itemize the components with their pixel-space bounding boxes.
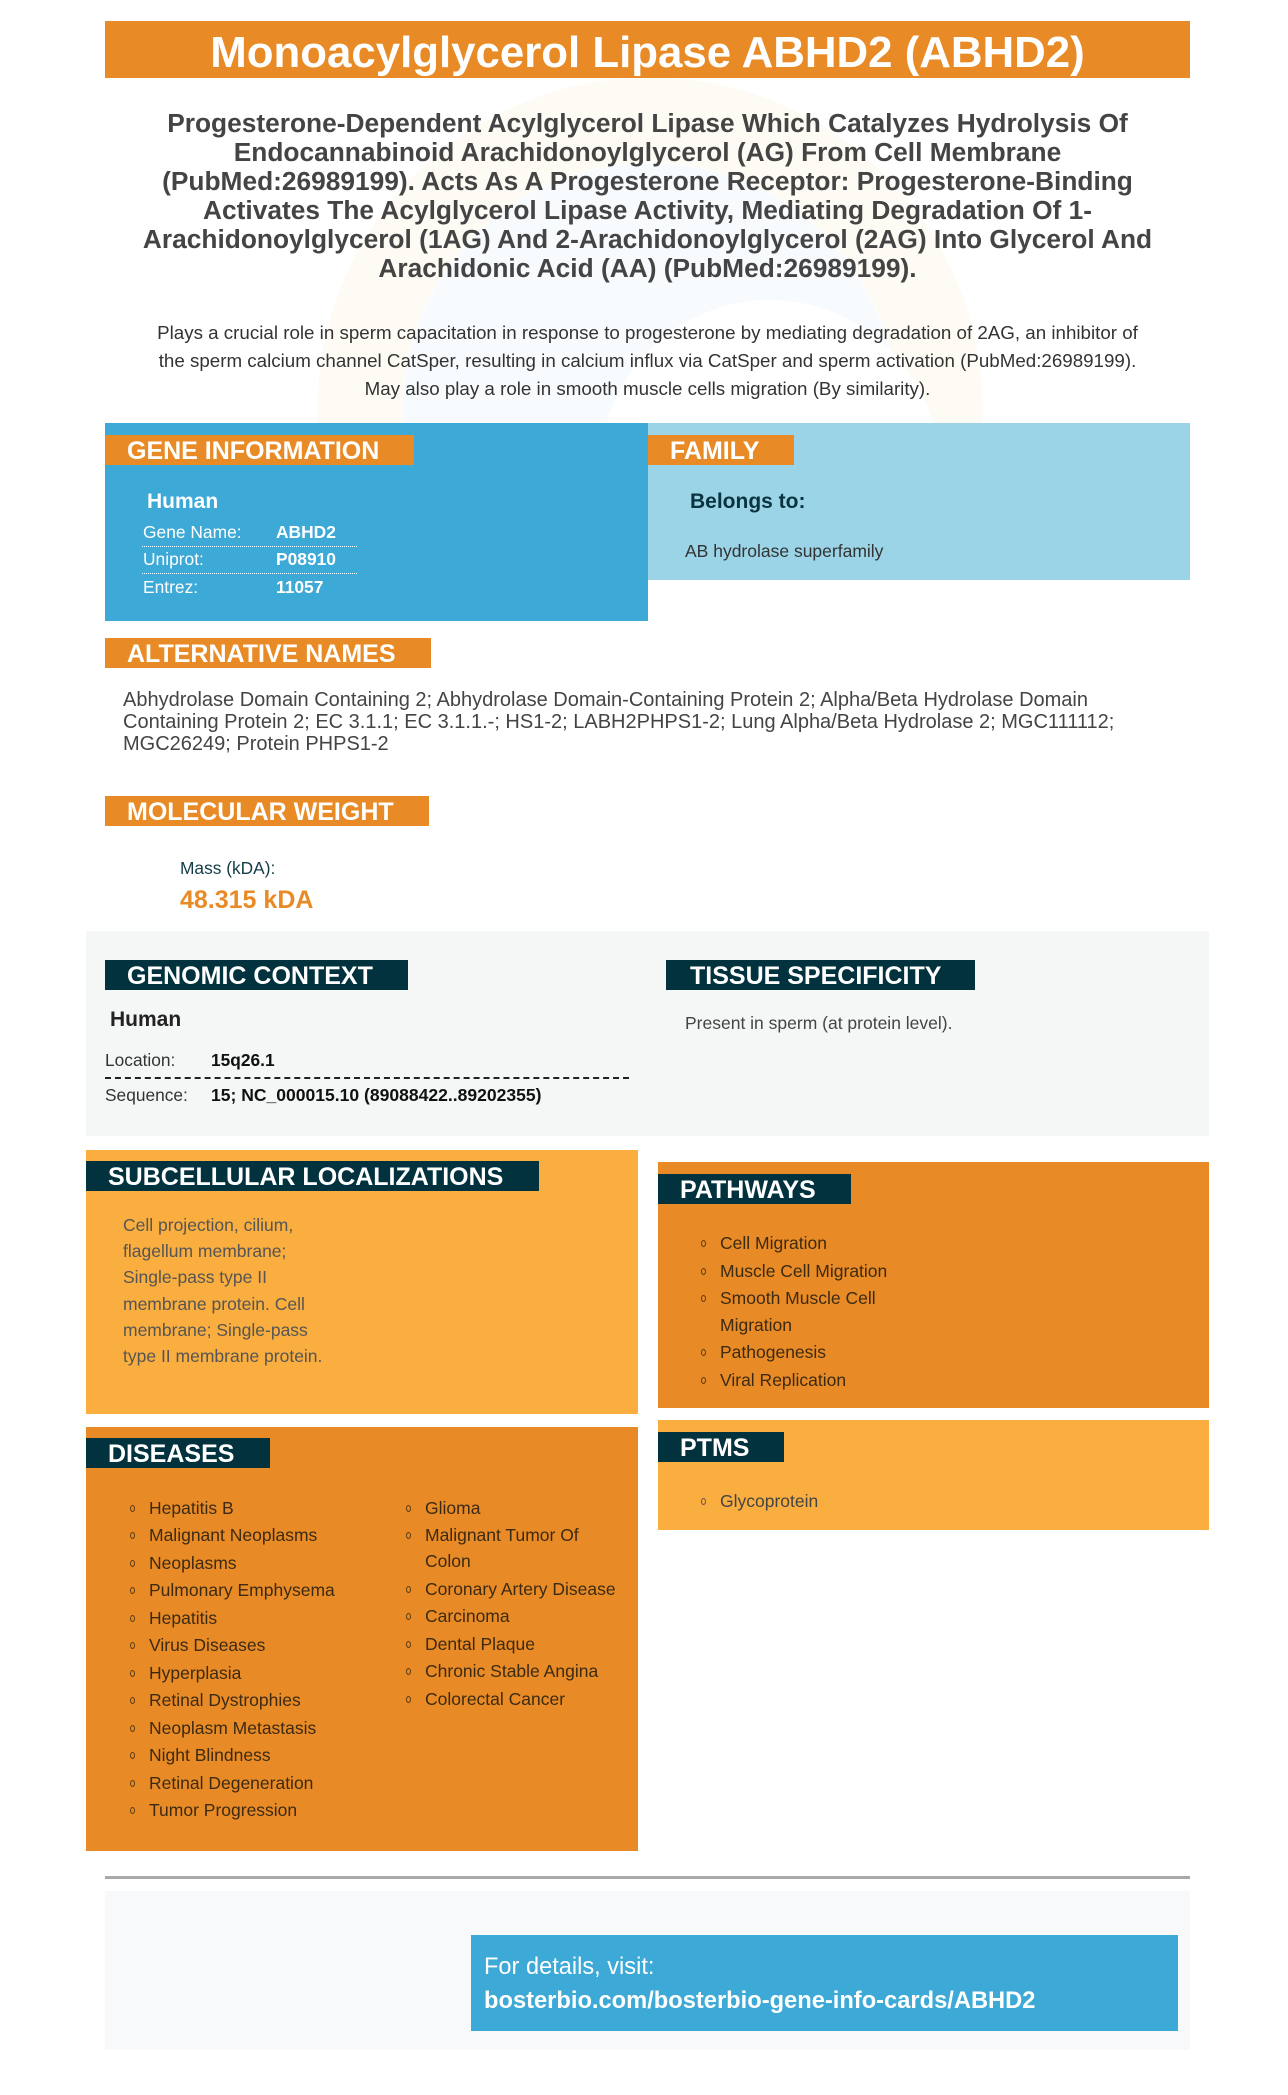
heading: diseases: DISEASES [108,1440,234,1468]
panel: family [648,423,1190,580]
pathway list: Migration [720,1315,792,1335]
sequence row: Sequence: [105,1085,188,1105]
disease list column 1: Retinal Dystrophies [149,1690,301,1710]
uniprot row: Uniprot: [143,549,204,569]
subtitle description: (PubMed:26989199). Acts As A Progesterone Receptor: Progesterone-Binding [162,166,1133,196]
panel: genomic context and tissue specificity [86,931,1209,1136]
disease list column 2: Carcinoma [425,1606,510,1626]
disease list column 1: Virus Diseases [149,1635,265,1655]
localization text [123,1215,322,1366]
alternative names text: MGC26249; Protein PHPS1-2 [123,733,389,755]
belongs to label: Belongs to: [690,490,806,513]
dashed divider [105,1077,629,1079]
disease list column 2: Colorectal Cancer [425,1689,565,1709]
pathway list [701,1233,887,1390]
localization text: Cell projection, cilium, [123,1215,293,1235]
disease list column 1: Hepatitis B [149,1498,234,1518]
entrez row: Entrez: [143,577,198,597]
uniprot row: P08910 [276,549,336,569]
disease list column 2: Malignant Tumor Of [425,1525,579,1545]
callout label: For details, visit: [484,1954,654,1980]
pathway list: Cell Migration [720,1233,827,1253]
mass value: 48.315 kDA [180,886,313,914]
alternative names text: Abhydrolase Domain Containing 2; Abhydrolase Domain-Containing Protein 2; Alpha/Beta Hydrolase Domain [123,689,1088,711]
panel: diseases [86,1427,638,1851]
disease list column 1: Tumor Progression [149,1800,297,1820]
pathway list: Pathogenesis [720,1342,826,1362]
species label: Human [110,1008,181,1031]
disease list column 2: Glioma [425,1498,480,1518]
disease list column 1: Hepatitis [149,1608,217,1628]
heading: alternative names: ALTERNATIVE NAMES [127,640,396,668]
localization text: membrane; Single-pass [123,1320,308,1340]
callout: details link [471,1935,1178,2031]
disease list column 1: Malignant Neoplasms [149,1525,317,1545]
pathway list: Smooth Muscle Cell [720,1288,876,1308]
family value: AB hydrolase superfamily [685,541,883,561]
heading: pathways [658,1174,851,1204]
disease list column 1: Neoplasms [149,1553,237,1573]
panel: ptms [658,1420,1209,1530]
subtitle description [143,108,1152,283]
disease list column 1: Night Blindness [149,1745,271,1765]
heading: tissue specificity: TISSUE SPECIFICITY [690,962,941,990]
uniprot row [142,549,357,574]
pathway list: Viral Replication [720,1370,846,1390]
disease list column 2: Chronic Stable Angina [425,1661,598,1681]
location row: Location: [105,1050,175,1070]
heading: ptms: PTMS [680,1434,749,1462]
subtitle description: Activates The Acylglycerol Lipase Activity, Mediating Degradation Of 1- [203,195,1092,225]
heading: genomic context: GENOMIC CONTEXT [127,962,373,990]
localization text: membrane protein. Cell [123,1294,305,1314]
panel: subcellular localizations [86,1150,638,1414]
tissue specificity text: Present in sperm (at protein level). [685,1013,952,1033]
disease list column 2 [406,1498,616,1709]
subtitle description: Endocannabinoid Arachidonoylglycerol (AG) From Cell Membrane [234,137,1061,167]
function paragraph [157,322,1138,399]
heading: family [648,435,794,465]
disease list column 1: Hyperplasia [149,1663,241,1683]
heading: pathways: PATHWAYS [680,1176,816,1204]
localization text: Single-pass type II [123,1267,267,1287]
gene name row [142,522,357,547]
function paragraph: Plays a crucial role in sperm capacitation in response to progesterone by mediating degradation of 2AG, an inhibitor of [157,322,1138,343]
entrez row [143,577,323,597]
alternative names text [123,689,1114,755]
disease list column 1: Retinal Degeneration [149,1773,313,1793]
localization text: flagellum membrane; [123,1241,286,1261]
disease list column 2: Coronary Artery Disease [425,1579,616,1599]
disease list column 1 [130,1498,335,1820]
footer panel [105,1876,1190,2050]
disease list column 2: Colon [425,1551,471,1571]
heading: gene information: GENE INFORMATION [127,437,379,465]
function paragraph: May also play a role in smooth muscle cells migration (By similarity). [365,378,930,399]
disease list column 1: Neoplasm Metastasis [149,1718,316,1738]
subtitle description: Arachidonic Acid (AA) (PubMed:26989199). [378,253,917,283]
heading: diseases [86,1438,270,1468]
gene name row: Gene Name: [143,522,242,542]
mass label: Mass (kDA): [180,858,275,878]
title banner [105,21,1190,78]
alternative names text: Containing Protein 2; EC 3.1.1; EC 3.1.1.-; HS1-2; LABH2PHPS1-2; Lung Alpha/Beta Hydrolase 2; MGC111112; [123,711,1114,733]
gene name row: ABHD2 [276,522,336,542]
ptm list: Glycoprotein [720,1491,818,1511]
panel: gene information [105,423,648,621]
species label: Human [147,490,218,513]
background watermark logo [318,78,982,423]
heading: molecular weight: MOLECULAR WEIGHT [127,798,394,826]
heading: subcellular localizations: SUBCELLULAR LOCALIZATIONS [108,1163,503,1191]
title banner: Monoacylglycerol Lipase ABHD2 (ABHD2) [210,28,1085,77]
subtitle description: Arachidonoylglycerol (1AG) And 2-Arachidonoylglycerol (2AG) Into Glycerol And [143,224,1152,254]
heading: family: FAMILY [670,437,759,465]
subtitle description: Progesterone-Dependent Acylglycerol Lipase Which Catalyzes Hydrolysis Of [167,108,1128,138]
callout url: bosterbio.com/bosterbio-gene-info-cards/ABHD2 [484,1988,1035,2014]
function paragraph: the sperm calcium channel CatSper, resulting in calcium influx via CatSper and sperm activation (PubMed:26989199). [159,350,1136,371]
panel: pathways [658,1162,1209,1408]
pathway list: Muscle Cell Migration [720,1261,887,1281]
location value: 15q26.1 [211,1050,275,1070]
entrez row: 11057 [276,577,323,597]
localization text: type II membrane protein. [123,1346,322,1366]
disease list column 1: Pulmonary Emphysema [149,1580,335,1600]
heading: ptms [658,1432,784,1462]
disease list column 2: Dental Plaque [425,1634,535,1654]
sequence value: 15; NC_000015.10 (89088422..89202355) [211,1085,541,1105]
